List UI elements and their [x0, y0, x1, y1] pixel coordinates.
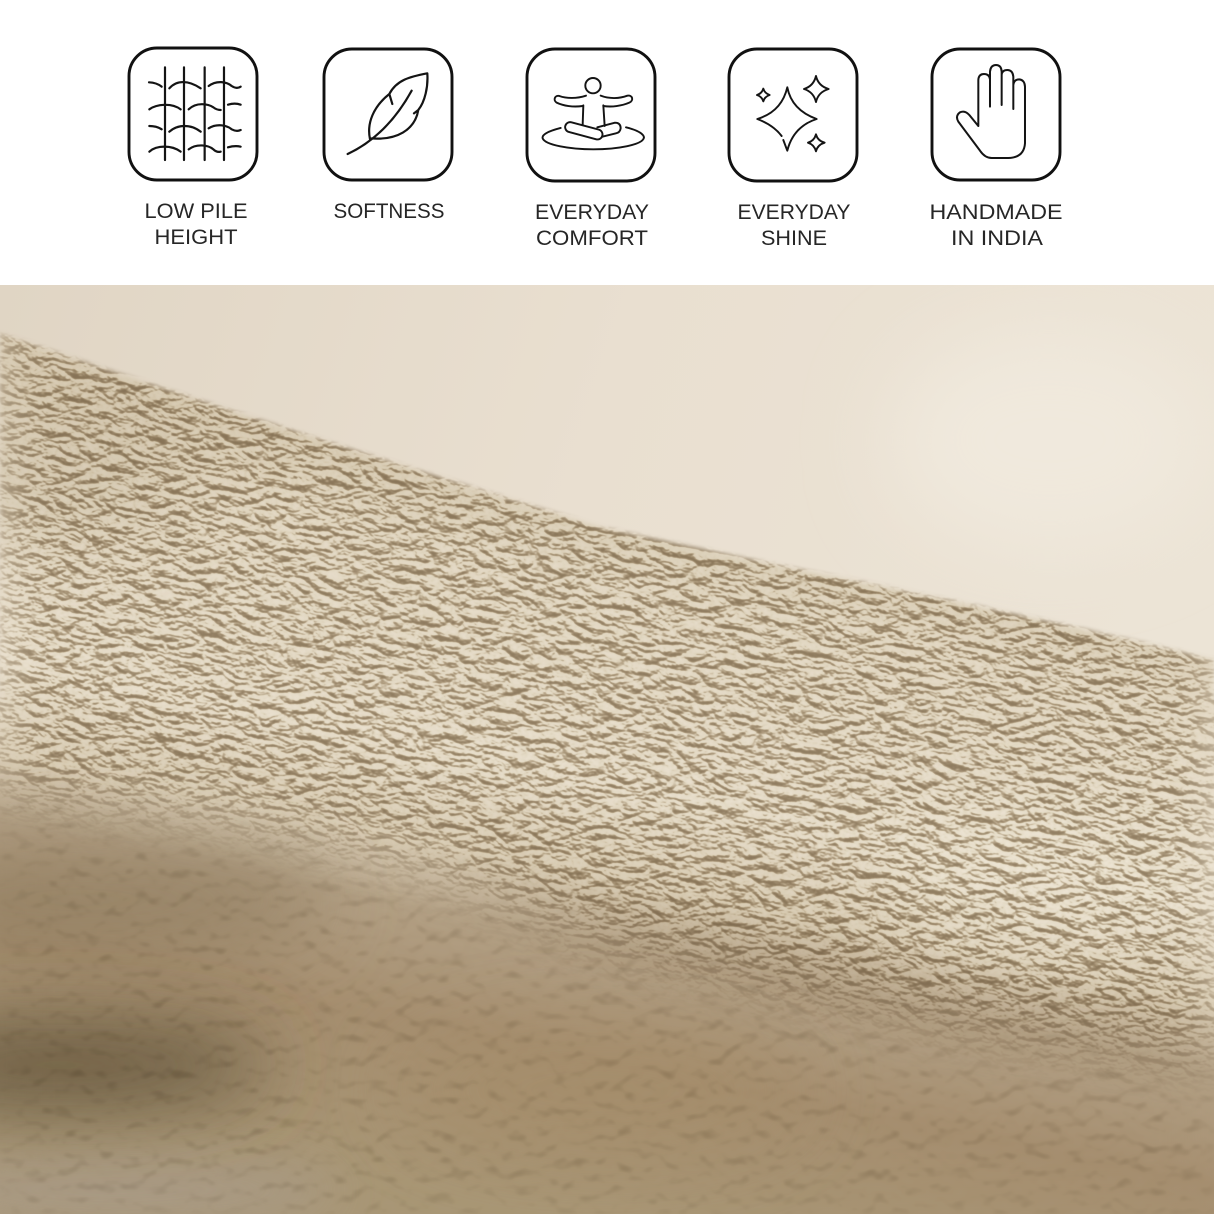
label: everyday shine: EVERYDAY: [738, 200, 850, 224]
icon: everyday shine sparkles: [729, 49, 857, 181]
label: everyday shine: SHINE: [761, 226, 827, 250]
label: low pile height: LOW PILE: [144, 199, 248, 223]
label: handmade in india: HANDMADE: [930, 200, 1062, 224]
photo: rolled beige rug close-up: [0, 285, 1214, 1214]
texture: looped pile: [606, 700, 607, 701]
icon: everyday comfort meditation: [527, 49, 655, 181]
icon: softness feather: [324, 49, 452, 180]
icon: handmade hand: [932, 49, 1060, 180]
label: everyday comfort: EVERYDAY: [535, 200, 649, 224]
label: handmade in india: [930, 200, 1062, 250]
label: everyday comfort: COMFORT: [536, 226, 648, 250]
texture: soft shaded pile: [4, 804, 1210, 1212]
label: handmade in india: IN INDIA: [951, 226, 1044, 250]
icon: low pile height: [129, 48, 257, 180]
label: low pile height: HEIGHT: [154, 225, 238, 249]
label: softness: SOFTNESS: [334, 199, 444, 223]
shadow: lower-left fold: [0, 1023, 270, 1107]
label: everyday shine: [738, 200, 850, 250]
label: low pile height: [144, 199, 248, 249]
label: everyday comfort: [535, 200, 649, 250]
